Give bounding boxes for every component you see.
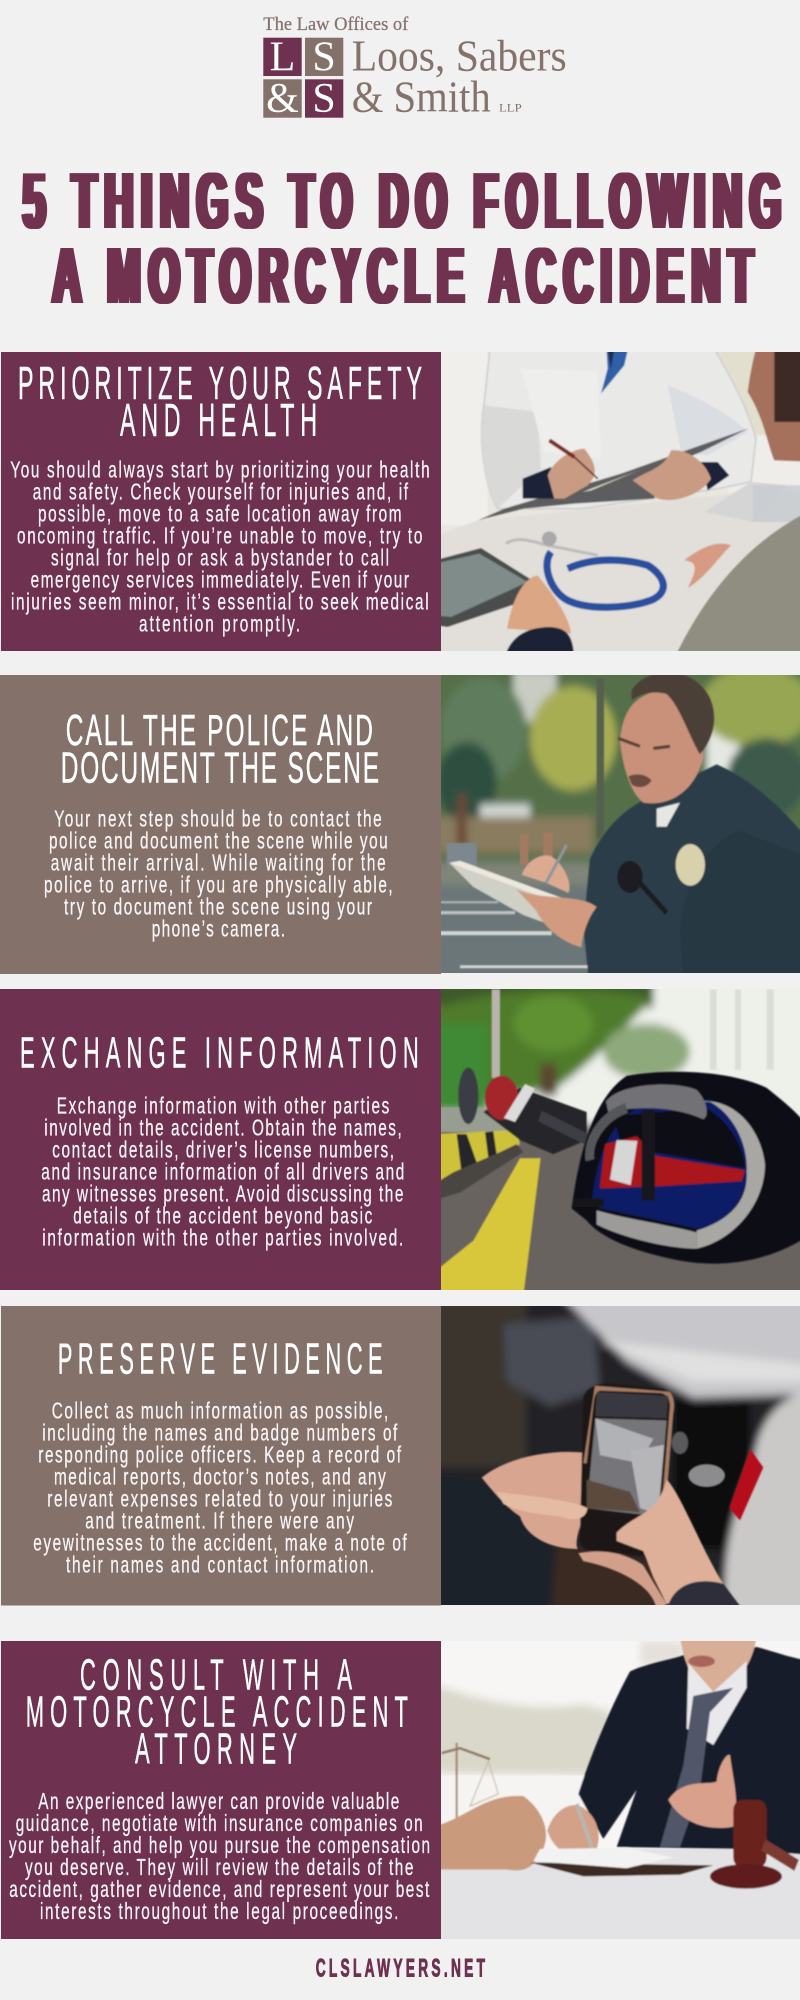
body text: and safety. Check yourself for injuries and, if bbox=[33, 479, 408, 505]
body text: information with the other parties involved. bbox=[42, 1226, 403, 1252]
panel: prioritize your safety and health bbox=[1, 339, 800, 665]
body text bbox=[41, 1094, 404, 1252]
blurred car background bbox=[441, 1306, 800, 1605]
logo firm name: Loos, Sabers bbox=[352, 32, 567, 81]
photo: fallen motorcycle and helmet on road bbox=[441, 989, 800, 1290]
panel: call the police and document the scene bbox=[0, 675, 800, 974]
panel background bbox=[0, 675, 441, 974]
heading: EXCHANGE INFORMATION bbox=[20, 1030, 419, 1078]
body text: responding police officers. Keep a record of bbox=[38, 1442, 401, 1468]
photo: police officer writing a report bbox=[441, 675, 800, 973]
logo firm name bbox=[352, 32, 567, 122]
logo firm name: & Smith bbox=[352, 73, 491, 122]
heading: MOTORCYCLE ACCIDENT bbox=[26, 1689, 408, 1737]
body text: Exchange information with other parties bbox=[57, 1094, 390, 1120]
photo: doctor with clipboard and stethoscope bbox=[441, 352, 800, 651]
body text: interests throughout the legal proceedings. bbox=[40, 1899, 398, 1925]
heading: AND HEALTH bbox=[120, 394, 317, 446]
body text: injuries seem minor, it’s essential to seek medical bbox=[11, 589, 429, 615]
body text bbox=[33, 1398, 407, 1578]
body text: their names and contact information. bbox=[66, 1552, 374, 1578]
panel: preserve evidence bbox=[1, 1306, 800, 1606]
body text: An experienced lawyer can provide valuable bbox=[38, 1789, 399, 1815]
body text: eyewitnesses to the accident, make a note of bbox=[33, 1530, 407, 1556]
body text: accident, gather evidence, and represent your best bbox=[9, 1877, 430, 1903]
body text: emergency services immediately. Even if your bbox=[31, 567, 409, 593]
body text: Collect as much information as possible, bbox=[52, 1398, 388, 1424]
body text: police to arrive, if you are physically able, bbox=[44, 873, 393, 899]
blurred tree and sky background bbox=[441, 989, 800, 1290]
body text bbox=[10, 457, 430, 637]
logo monogram squares: & bbox=[266, 76, 299, 122]
logo monogram squares: S bbox=[312, 76, 336, 122]
heading: DOCUMENT THE SCENE bbox=[61, 743, 379, 792]
heading: PRESERVE EVIDENCE bbox=[58, 1335, 383, 1383]
logo monogram squares: S bbox=[312, 34, 336, 80]
body text: Your next step should be to contact the bbox=[54, 807, 382, 833]
logo monogram squares: L bbox=[270, 34, 295, 80]
body text bbox=[9, 1789, 430, 1925]
body text: attention promptly. bbox=[139, 611, 300, 637]
body text: including the names and badge numbers of bbox=[42, 1420, 398, 1446]
panel: exchange information bbox=[0, 989, 800, 1290]
body text: and insurance information of all drivers and bbox=[41, 1160, 404, 1186]
logo firm name: LLP bbox=[499, 101, 522, 115]
photo: hands photographing damaged car with phone bbox=[441, 1306, 800, 1605]
body text: involved in the accident. Obtain the names, bbox=[44, 1116, 402, 1142]
photo: lawyer with client, gavel and scales bbox=[441, 1641, 800, 1939]
panel background bbox=[0, 989, 441, 1290]
body text: medical reports, doctor’s notes, and any bbox=[54, 1464, 386, 1490]
body text: your behalf, and help you pursue the compensation bbox=[9, 1833, 430, 1859]
title: A MOTORCYCLE ACCIDENT bbox=[52, 232, 753, 321]
blurred bright background bbox=[441, 1641, 682, 1776]
heading bbox=[61, 705, 379, 792]
body text: contact details, driver’s license numbers, bbox=[52, 1138, 394, 1164]
footer website: CLSLAWYERS.NET bbox=[316, 1956, 485, 1983]
heading: PRIORITIZE YOUR SAFETY bbox=[18, 357, 422, 409]
body text: relevant expenses related to your injuries bbox=[47, 1486, 393, 1512]
title: 5 THINGS TO DO FOLLOWING bbox=[23, 157, 781, 246]
body text: signal for help or ask a bystander to call bbox=[51, 545, 389, 571]
body text: police and document the scene while you bbox=[49, 829, 388, 855]
body text: You should always start by prioritizing your health bbox=[10, 457, 430, 483]
body text: try to document the scene using your bbox=[64, 895, 372, 921]
panel background bbox=[1, 1641, 441, 1939]
panel background bbox=[1, 352, 441, 651]
heading: ATTORNEY bbox=[135, 1725, 297, 1773]
body text: any witnesses present. Avoid discussing the bbox=[42, 1182, 403, 1208]
body text: await their arrival. While waiting for the bbox=[51, 851, 386, 877]
title bbox=[23, 157, 781, 321]
heading: CALL THE POLICE AND bbox=[66, 705, 373, 755]
heading bbox=[26, 1651, 408, 1773]
logo monogram squares bbox=[263, 34, 343, 122]
panel: consult with a motorcycle accident attorney bbox=[1, 1641, 800, 1939]
body text: details of the accident beyond basic bbox=[73, 1204, 372, 1230]
heading bbox=[18, 357, 422, 446]
body text: guidance, negotiate with insurance companies on bbox=[16, 1811, 423, 1837]
body text bbox=[44, 807, 393, 943]
body text: you deserve. They will review the details of the bbox=[25, 1855, 413, 1881]
heading: CONSULT WITH A bbox=[80, 1651, 353, 1699]
body text: oncoming traffic. If you’re unable to move, try to bbox=[17, 523, 423, 549]
body text: possible, move to a safe location away from bbox=[38, 501, 402, 527]
logo tagline: The Law Offices of bbox=[263, 14, 409, 35]
panel background bbox=[1, 1306, 441, 1606]
blurred park background bbox=[441, 675, 800, 973]
logo bbox=[263, 14, 567, 122]
body text: phone’s camera. bbox=[152, 917, 285, 943]
body text: and treatment. If there were any bbox=[85, 1508, 354, 1534]
